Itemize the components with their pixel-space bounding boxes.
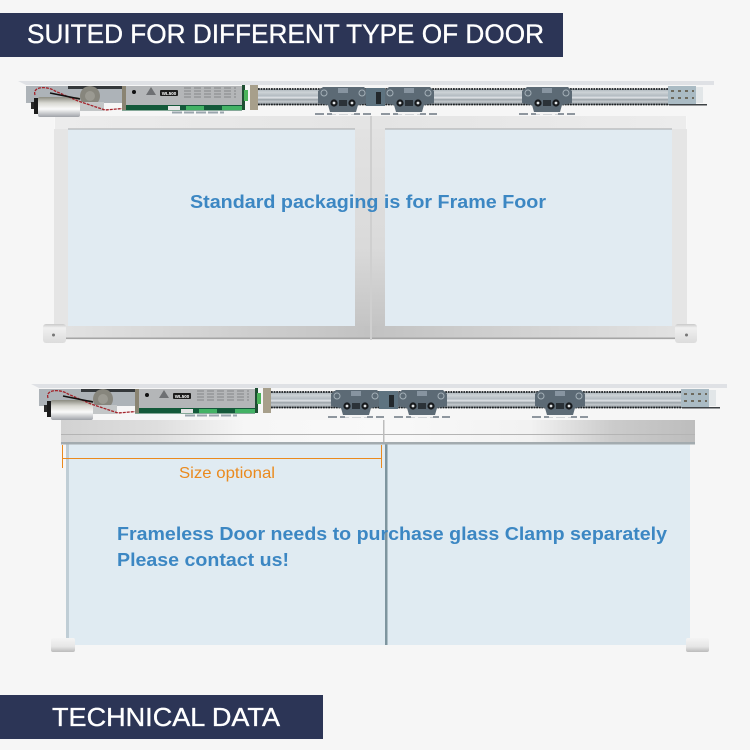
door operator: bottom [31,384,727,420]
right floor guide [686,638,709,652]
door operator: bottom: WL500 [175,394,190,399]
caption: frameless door: Frameless Door needs to purchase glass Clamp separately [117,523,668,544]
framed sliding door [43,116,697,343]
technical data banner: TECHNICAL DATA [52,702,281,732]
door operator: top [18,81,714,117]
right glass pane [385,128,672,326]
centre glass joint [385,443,388,645]
left floor stop [43,324,66,343]
frameless glass door [51,420,709,652]
title banner [0,13,563,57]
door operator: top: WL500 [162,91,177,96]
dimension line: size optional [62,445,382,482]
left glass pane [68,128,355,326]
left floor guide [51,638,75,652]
caption: frame door: Standard packaging is for Frame Foor [190,191,546,212]
technical data banner [0,695,323,739]
caption: frameless door [117,523,668,570]
door frame [54,116,687,340]
left glass edge [66,443,69,645]
title banner: SUITED FOR DIFFERENT TYPE OF DOOR [27,19,544,49]
right floor stop [675,324,697,343]
caption: frameless door: Please contact us! [117,549,289,570]
glass panes [67,443,690,645]
header clamp [61,420,695,444]
dimension line: size optional: Size optional [179,465,275,482]
